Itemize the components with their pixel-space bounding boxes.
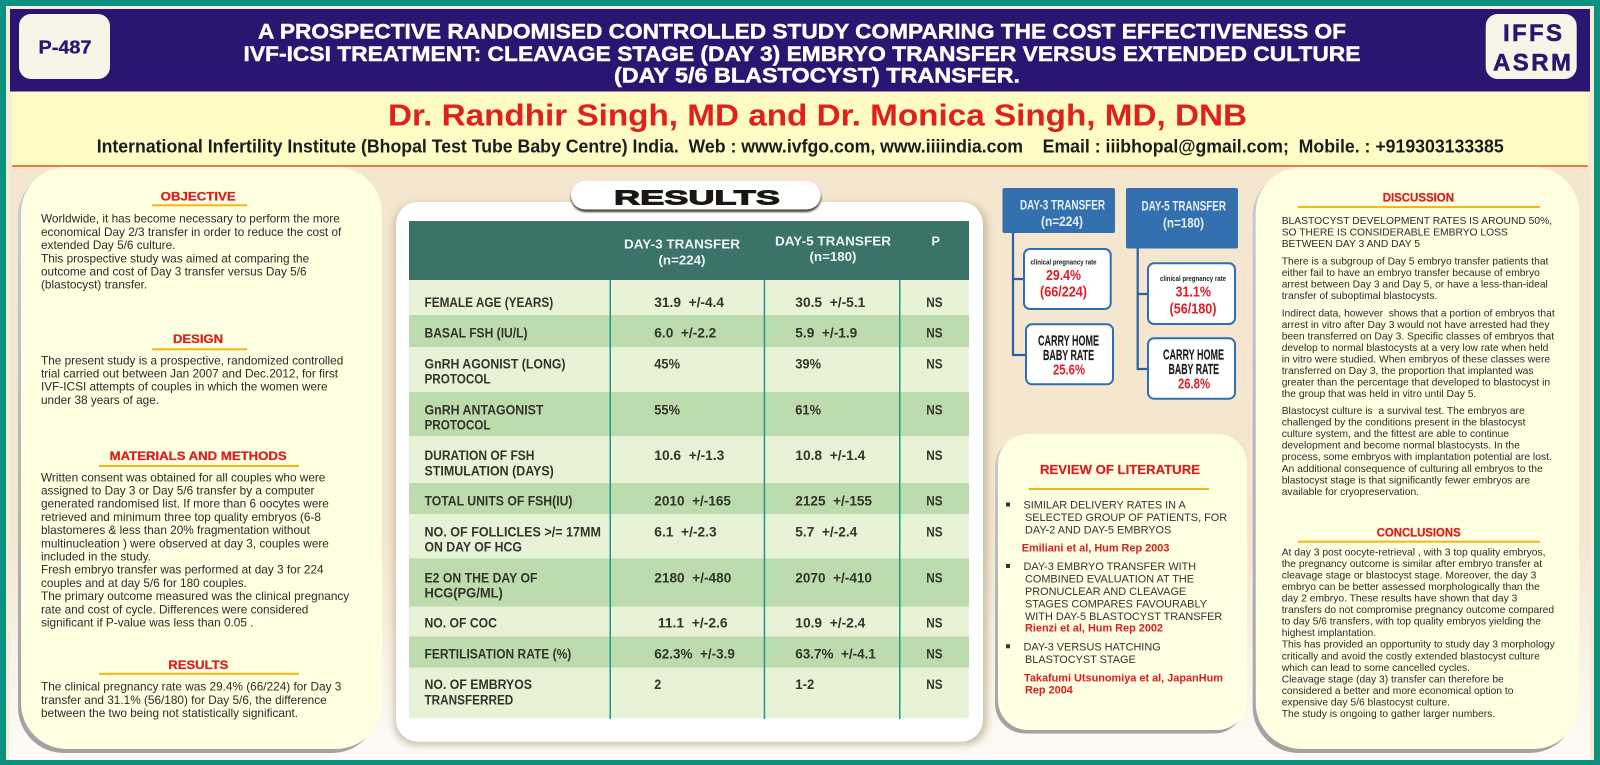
- table header: DAY-5 TRANSFER: [775, 235, 891, 249]
- row: follicles: 5.7 +/-2.4: [795, 525, 858, 540]
- title: [244, 19, 1360, 87]
- row: basal FSH: 6.0 +/-2.2: [654, 326, 716, 340]
- box: day-3 carry home baby rate: CARRY HOME: [1038, 334, 1099, 350]
- row: total FSH units: [424, 494, 943, 509]
- row: GnRH antagonist: PROTOCOL: [424, 418, 490, 433]
- row: total FSH units: NS: [926, 494, 943, 509]
- institute and contact details: International Infertility Institute (Bhopal Test Tube Baby Centre) India. Web : www.ivfgo.com, www.iiiindia.com Email : iiibhopal@gmail.com; Mobile. : +919303133385: [97, 136, 1504, 156]
- box: day-5 clinical pregnancy rate: clinical pregnancy rate: [1160, 276, 1226, 283]
- row: GnRH agonist: 45%: [654, 356, 680, 371]
- bullet item: hatching blastocyst: Takafumi Utsunomiya et al, JapanHum: [1024, 673, 1223, 685]
- text: objective: outcome and cost of Day 3 transfer versus Day 5/6: [41, 264, 307, 278]
- bullet item: combined evaluation: PRONUCLEAR AND CLEAVAGE: [1025, 586, 1186, 598]
- row: GnRH antagonist: [424, 402, 943, 433]
- text: conclusions: the pregnancy outcome is similar after embryo transfer at: [1282, 559, 1542, 570]
- row: E2: 2180 +/-480: [654, 570, 731, 585]
- badge: conference names: IFFS: [1503, 20, 1562, 47]
- text: materials and methods: included in the study.: [41, 550, 151, 564]
- panel: right column: [1253, 167, 1579, 753]
- title: IVF-ICSI TREATMENT: CLEAVAGE STAGE (DAY 3) EMBRYO TRANSFER VERSUS EXTENDED CULTURE: [244, 42, 1360, 66]
- text: materials and methods: blastomeres & less than 20% fragmentation without: [41, 523, 311, 537]
- text: materials and methods: significant if P-value was less than 0.05 .: [41, 616, 253, 630]
- authors: Dr. Randhir Singh, MD and Dr. Monica Singh, MD, DNB: [388, 98, 1247, 132]
- panel: left column: [18, 167, 382, 753]
- text: discussion: BLASTOCYST DEVELOPMENT RATES IS AROUND 50%,: [1282, 216, 1552, 227]
- text: discussion: There is a subgroup of Day 5 embryo transfer patients that: [1282, 256, 1549, 267]
- box: day-3 carry home baby rate: [1026, 324, 1113, 384]
- flowchart: day-5 transfer: [1126, 188, 1238, 399]
- text: discussion: Blastocyst culture is a survival test. The embryos are: [1282, 406, 1525, 417]
- row: GnRH antagonist: 61%: [795, 402, 821, 417]
- box: day-5 header: DAY-5 TRANSFER: [1142, 198, 1226, 214]
- box: day-3 header: DAY-3 TRANSFER: [1020, 196, 1105, 212]
- box: day-5 clinical pregnancy rate: 31.1%: [1176, 284, 1211, 301]
- row: female age: NS: [926, 295, 943, 310]
- text: discussion: challenged by the conditions present in the blastocyst: [1282, 418, 1526, 429]
- text: objective: economical Day 2/3 transfer in order to reduce the cost of: [41, 225, 342, 239]
- row: FSH duration: STIMULATION (DAYS): [424, 463, 554, 478]
- table header: P: [932, 235, 940, 249]
- text: materials and methods: generated randomised list. If more than 6 oocytes were: [41, 497, 329, 511]
- table header: (n=224): [658, 254, 706, 268]
- badge: conference names: ASRM: [1493, 50, 1571, 77]
- row: COC: [424, 616, 943, 631]
- bullet item: similar delivery rates: DAY-2 AND DAY-5 EMBRYOS: [1025, 524, 1171, 536]
- title: A PROSPECTIVE RANDOMISED CONTROLLED STUDY COMPARING THE COST EFFECTIVENESS OF: [258, 19, 1346, 43]
- bullet item: combined evaluation: STAGES COMPARES FAVOURABLY: [1025, 598, 1208, 610]
- bullet item: combined evaluation: COMBINED EVALUATION AT THE: [1025, 574, 1194, 586]
- panel: results table card: [394, 202, 987, 745]
- row: E2: E2 ON THE DAY OF: [424, 570, 538, 585]
- text: objective: This prospective study was aimed at comparing the: [41, 251, 310, 265]
- text: materials and methods: assigned to Day 3 or Day 5/6 transfer by a computer: [41, 484, 315, 498]
- box: day-3 clinical pregnancy rate: [1024, 249, 1111, 309]
- panel: review of literature: [995, 434, 1247, 734]
- text: conclusions: day 2 embryo. These results have shown that day 3: [1282, 594, 1518, 604]
- text: discussion: develop to normal blastocysts at a very low rate when held: [1282, 343, 1549, 354]
- bullet item: similar delivery rates: Emiliani et al, Hum Rep 2003: [1022, 543, 1169, 555]
- heading: design: DESIGN: [173, 334, 223, 346]
- row: female age: 31.9 +/-4.4: [654, 295, 725, 310]
- table header: DAY-3 TRANSFER: [624, 238, 740, 252]
- text: objective: extended Day 5/6 culture.: [41, 238, 175, 252]
- row: FSH duration: DURATION OF FSH: [424, 448, 534, 463]
- row: COC: 10.9 +/-2.4: [795, 616, 866, 631]
- row: FSH duration: 10.6 +/-1.3: [654, 448, 724, 463]
- box: day-5 header: (n=180): [1163, 214, 1204, 230]
- author band: [12, 92, 1588, 167]
- text: design: trial carried out between Jan 2007 and Dec.2012, for first: [41, 366, 339, 380]
- text: discussion: available for cryopreservation.: [1282, 487, 1419, 498]
- badge: poster number: P-487: [38, 38, 92, 58]
- badge: conference names: [1486, 14, 1577, 79]
- row: FSH duration: NS: [926, 448, 943, 463]
- row: E2: [424, 570, 943, 600]
- heading: conclusions: CONCLUSIONS: [1377, 528, 1461, 540]
- row: fertilisation rate: NS: [926, 647, 943, 662]
- text: discussion: in vitro were studied. When embryos of these classes were: [1282, 354, 1550, 366]
- row: FSH duration: [424, 448, 943, 478]
- bullet item: similar delivery rates: [1006, 499, 1230, 555]
- row: female age: [424, 295, 943, 310]
- row: E2: HCG(PG/ML): [424, 585, 503, 600]
- row: total FSH units: 2010 +/-165: [654, 494, 732, 509]
- row: basal FSH: 5.9 +/-1.9: [795, 326, 857, 340]
- row: embryos transferred: 1-2: [795, 677, 814, 692]
- row: total FSH units: TOTAL UNITS OF FSH(IU): [424, 494, 572, 509]
- text: materials and methods: Fresh embryo transfer was performed at day 3 for 224: [41, 563, 324, 577]
- bullet item: hatching blastocyst: BLASTOCYST STAGE: [1025, 654, 1136, 666]
- results table: [409, 221, 969, 719]
- connector lines day-3: [1013, 233, 1026, 355]
- text: conclusions: highest implantation.: [1282, 628, 1376, 639]
- text: conclusions: considered a better and more economical option to: [1282, 686, 1514, 697]
- row: follicles: NO. OF FOLLICLES >/= 17MM: [424, 525, 601, 540]
- heading: objective: OBJECTIVE: [161, 192, 236, 204]
- row: total FSH units: 2125 +/-155: [795, 494, 873, 509]
- row: embryos transferred: 2: [654, 677, 661, 692]
- row: GnRH agonist: PROTOCOL: [424, 372, 490, 387]
- text: materials and methods: Written consent was obtained for all couples who were: [41, 470, 326, 484]
- box: day-5 carry home baby rate: 26.8%: [1178, 375, 1210, 392]
- row: fertilisation rate: 63.7% +/-4.1: [795, 647, 876, 662]
- text: conclusions: This has provided an opportunity to study day 3 morphology: [1282, 640, 1556, 651]
- text: discussion: process, some embryos with implantation potential are lost.: [1282, 452, 1552, 463]
- row: basal FSH: NS: [926, 326, 943, 340]
- row: female age: FEMALE AGE (YEARS): [424, 295, 553, 310]
- row: COC: NO. OF COC: [424, 616, 497, 631]
- text: discussion: development and become normal blastocysts. In the: [1282, 441, 1520, 452]
- row: E2: NS: [926, 570, 943, 585]
- text: objective: Worldwide, it has become necessary to perform the more: [41, 212, 340, 226]
- bullet item: combined evaluation: DAY-3 EMBRYO TRANSFER WITH: [1024, 561, 1196, 573]
- box: day-5 carry home baby rate: [1148, 338, 1235, 399]
- row: GnRH agonist: NS: [926, 356, 943, 371]
- heading: results pill: RESULTS: [614, 187, 780, 209]
- heading: results summary: RESULTS: [168, 660, 229, 672]
- text: results summary: transfer and 31.1% (56/180) for Day 5/6, the difference: [41, 693, 327, 707]
- text: discussion: either fail to have an embryo transfer because of embryo: [1282, 268, 1540, 279]
- text: discussion: been transferred on Day 3. Specific classes of embryos that: [1282, 331, 1554, 342]
- row: GnRH antagonist: 55%: [654, 402, 680, 417]
- text: discussion: culture system, and the fittest are able to continue: [1282, 429, 1509, 440]
- row: GnRH antagonist: NS: [926, 402, 943, 417]
- text: conclusions: embryo can be better assessed morphologically than the: [1282, 582, 1540, 593]
- text: discussion: transferred on Day 3, the proportion that implanted was: [1282, 366, 1534, 377]
- text: discussion: Indirect data, however shows that a portion of embryos that: [1282, 308, 1555, 319]
- text: objective: (blastocyst) transfer.: [41, 278, 147, 292]
- text: conclusions: The study is ongoing to gather larger numbers.: [1282, 709, 1495, 720]
- heading: review of literature: REVIEW OF LITERATURE: [1040, 463, 1200, 477]
- text: discussion: greater than the percentage that developed to blastocyst in: [1282, 378, 1550, 389]
- text: discussion: arrest in vitro after Day 3 would not have arrested had they: [1282, 320, 1550, 331]
- box: day-3 clinical pregnancy rate: (66/224): [1040, 284, 1087, 301]
- text: discussion: blastocyst stage is that significantly fewer embryos are: [1282, 475, 1530, 486]
- flowchart: day-3 transfer: [1002, 188, 1115, 384]
- text: discussion: An additional consequence of culturing all embryos to the: [1282, 464, 1543, 475]
- header banner: [10, 9, 1590, 92]
- box: day-3 carry home baby rate: 25.6%: [1053, 361, 1085, 378]
- row: embryos transferred: [424, 677, 943, 707]
- text: results summary: between the two being not statistically significant.: [41, 706, 298, 720]
- row: female age: 30.5 +/-5.1: [795, 295, 866, 310]
- row: FSH duration: 10.8 +/-1.4: [795, 448, 866, 463]
- box: day-3 header: [1002, 188, 1115, 233]
- heading: results pill: [571, 181, 821, 212]
- row: embryos transferred: NS: [926, 677, 943, 692]
- text: discussion: BETWEEN DAY 3 AND DAY 5: [1282, 239, 1420, 250]
- bullet item: hatching blastocyst: [1006, 642, 1226, 697]
- text: discussion: the group that was held in vitro until Day 5.: [1282, 389, 1476, 400]
- box: day-5 header: [1126, 188, 1238, 248]
- row: follicles: NS: [926, 525, 943, 540]
- heading: discussion: DISCUSSION: [1383, 192, 1454, 204]
- box: day-3 clinical pregnancy rate: clinical pregnancy rate: [1030, 259, 1097, 266]
- text: conclusions: At day 3 post oocyte-retrieval , with 3 top quality embryos,: [1282, 547, 1546, 558]
- row: GnRH antagonist: GnRH ANTAGONIST: [424, 402, 544, 417]
- row: COC: NS: [926, 616, 943, 631]
- row: follicles: ON DAY OF HCG: [424, 540, 522, 555]
- connector lines day-5: [1138, 248, 1148, 369]
- bullet item: similar delivery rates: SIMILAR DELIVERY RATES IN A: [1024, 499, 1186, 511]
- box: day-5 carry home baby rate: CARRY HOME: [1163, 347, 1224, 363]
- row: fertilisation rate: 62.3% +/-3.9: [654, 647, 735, 662]
- text: conclusions: critically and avoid the costly extended blastocyst culture: [1282, 651, 1540, 662]
- row: follicles: [424, 525, 943, 555]
- text: conclusions: cleavage stage or blastocyst stage. Moreover, the day 3: [1282, 570, 1537, 581]
- bullet item: combined evaluation: [1006, 561, 1222, 635]
- row: embryos transferred: NO. OF EMBRYOS: [424, 677, 532, 692]
- box: day-3 clinical pregnancy rate: 29.4%: [1046, 267, 1081, 284]
- heading: objective: [152, 192, 247, 206]
- text: conclusions: transfers do not compromise pregnancy outcome compared: [1282, 605, 1554, 616]
- bullet item: combined evaluation: WITH DAY-5 BLASTOCYST TRANSFER: [1025, 611, 1222, 623]
- table header: [624, 235, 940, 268]
- text: design: under 38 years of age.: [41, 393, 159, 407]
- text: conclusions: to day 5/6 transfers, with top quality embryos yielding the: [1282, 617, 1541, 628]
- text: design: IVF-ICSI attempts of couples in which the women were: [41, 380, 328, 394]
- text: results summary: The clinical pregnancy rate was 29.4% (66/224) for Day 3: [41, 680, 342, 694]
- badge: poster number: [19, 14, 110, 79]
- heading: materials and methods: MATERIALS AND METHODS: [110, 451, 287, 463]
- row: fertilisation rate: [424, 647, 943, 662]
- bullet item: hatching blastocyst: DAY-3 VERSUS HATCHING: [1024, 642, 1161, 654]
- box: day-5 clinical pregnancy rate: [1148, 263, 1235, 324]
- row: basal FSH: [424, 326, 943, 340]
- text: conclusions: which can lead to some cancelled cycles.: [1281, 663, 1470, 674]
- row: GnRH agonist: GnRH AGONIST (LONG): [424, 356, 566, 371]
- text: discussion: transfer of suboptimal blastocysts.: [1282, 291, 1437, 302]
- row: GnRH agonist: [424, 356, 943, 387]
- row: follicles: 6.1 +/-2.3: [654, 525, 717, 540]
- text: discussion: SO THERE IS CONSIDERABLE EMBRYO LOSS: [1282, 228, 1508, 239]
- row: COC: 11.1 +/-2.6: [658, 616, 728, 631]
- box: day-5 clinical pregnancy rate: (56/180): [1170, 300, 1216, 317]
- table header: (n=180): [810, 250, 856, 264]
- text: materials and methods: The primary outcome measured was the clinical pregnancy: [41, 589, 349, 603]
- bullet item: combined evaluation: Rienzi et al, Hum Rep 2002: [1025, 623, 1163, 635]
- box: day-3 carry home baby rate: BABY RATE: [1043, 348, 1094, 364]
- text: discussion: arrest between Day 3 and Day 5, or have a less-than-ideal: [1282, 279, 1548, 290]
- title: (DAY 5/6 BLASTOCYST) TRANSFER.: [614, 63, 1020, 87]
- row: fertilisation rate: FERTILISATION RATE (%): [424, 647, 571, 662]
- box: day-3 header: (n=224): [1041, 213, 1083, 229]
- text: materials and methods: retrieved and minimum three top quality embryos (6-8: [41, 510, 321, 524]
- text: materials and methods: couples and at day 5/6 for 180 couples.: [41, 576, 247, 590]
- row: GnRH agonist: 39%: [795, 356, 821, 371]
- row: embryos transferred: TRANSFERRED: [424, 692, 514, 707]
- text: design: The present study is a prospective, randomized controlled: [41, 353, 343, 367]
- row: E2: 2070 +/-410: [795, 570, 872, 585]
- text: materials and methods: rate and cost of cycle. Differences were considered: [41, 602, 308, 616]
- text: materials and methods: multinucleation ) were observed at day 3, couples were: [41, 536, 329, 550]
- bullet item: similar delivery rates: SELECTED GROUP OF PATIENTS, FOR: [1025, 512, 1227, 524]
- text: conclusions: expensive day 5/6 blastocyst culture.: [1282, 697, 1450, 708]
- heading: design: [152, 334, 247, 350]
- text: conclusions: Cleavage stage (day 3) transfer can therefore be: [1282, 674, 1504, 685]
- row: basal FSH: BASAL FSH (IU/L): [424, 326, 528, 340]
- box: day-5 carry home baby rate: BABY RATE: [1168, 362, 1219, 378]
- bullet item: hatching blastocyst: Rep 2004: [1025, 685, 1073, 697]
